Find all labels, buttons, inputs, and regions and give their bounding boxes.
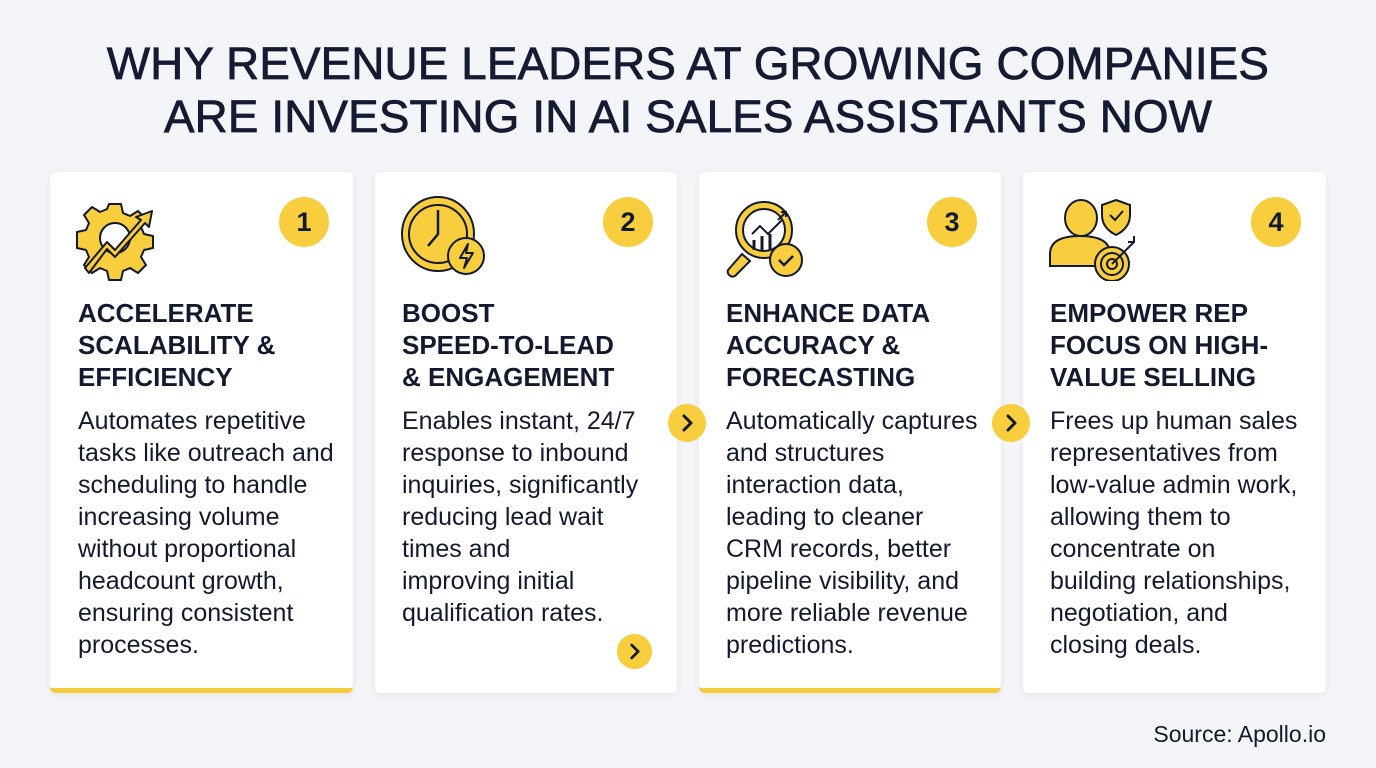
number badge 4: 4 [1268, 207, 1284, 237]
heading 4 [1050, 298, 1268, 392]
panel: card 3 [699, 172, 1001, 693]
heading 3: ACCURACY & [726, 330, 900, 360]
heading 1: SCALABILITY & [78, 330, 275, 360]
heading 4: EMPOWER REP [1050, 298, 1248, 328]
body 1: scheduling to handle [78, 471, 307, 499]
body 4: representatives from [1050, 439, 1278, 467]
panel: card 2 [375, 172, 677, 693]
number badge 3: 3 [944, 207, 960, 237]
heading 2: BOOST [402, 298, 494, 328]
heading 2: SPEED-TO-LEAD [402, 330, 614, 360]
panel: card 4 [1023, 172, 1326, 693]
heading 3: FORECASTING [726, 362, 915, 392]
body 4 [1050, 407, 1297, 659]
body 2: improving initial [402, 567, 574, 595]
body 3: predictions. [726, 631, 854, 659]
number badge 3 [927, 197, 977, 247]
heading 4: VALUE SELLING [1050, 362, 1256, 392]
body 1 [78, 407, 334, 659]
number badge 1 [279, 197, 329, 247]
body 3 [726, 407, 978, 659]
body 1: ensuring consistent [78, 599, 293, 627]
number badge 4 [1251, 197, 1301, 247]
body 3: more reliable revenue [726, 599, 968, 627]
icon: person shield target [1049, 199, 1135, 281]
heading 1: EFFICIENCY [78, 362, 233, 392]
body 3: Automatically captures [726, 407, 978, 435]
title: ARE INVESTING IN AI SALES ASSISTANTS NOW [164, 91, 1212, 142]
arrow: card 2 bottom [617, 634, 652, 669]
heading 2: & ENGAGEMENT [402, 362, 614, 392]
number badge 2 [603, 197, 653, 247]
heading 2 [402, 298, 614, 392]
body 2: response to inbound [402, 439, 629, 467]
body 1: Automates repetitive [78, 407, 306, 435]
body 2 [402, 407, 638, 627]
body 4: low-value admin work, [1050, 471, 1297, 499]
body 3: CRM records, better [726, 535, 951, 563]
heading 4: FOCUS ON HIGH- [1050, 330, 1268, 360]
source note: Source: Apollo.io [1153, 721, 1326, 747]
body 2: Enables instant, 24/7 [402, 407, 636, 435]
body 1: without proportional [78, 535, 296, 563]
body 3: interaction data, [726, 471, 904, 499]
body 3: and structures [726, 439, 884, 467]
body 4: Frees up human sales [1050, 407, 1297, 435]
arrow: card 2 to 3 [668, 404, 706, 442]
body 1: headcount growth, [78, 567, 284, 595]
heading 3: ENHANCE DATA [726, 298, 930, 328]
heading 1: ACCELERATE [78, 298, 254, 328]
title [106, 38, 1269, 142]
number badge 2: 2 [620, 207, 636, 237]
number badge 1: 1 [296, 207, 312, 237]
body 1: increasing volume [78, 503, 280, 531]
body 4: building relationships, [1050, 567, 1290, 595]
body 4: negotiation, and [1050, 599, 1228, 627]
icon: clock with lightning [401, 196, 485, 275]
body 2: inquiries, significantly [402, 471, 638, 499]
heading 3 [726, 298, 930, 392]
body 3: leading to cleaner [726, 503, 923, 531]
panel: card 1 [50, 172, 353, 693]
icon: gear with arrow [76, 203, 154, 281]
body 3: pipeline visibility, and [726, 567, 959, 595]
body 4: closing deals. [1050, 631, 1201, 659]
body 4: allowing them to [1050, 503, 1231, 531]
body 2: qualification rates. [402, 599, 604, 627]
body 4: concentrate on [1050, 535, 1215, 563]
body 1: processes. [78, 631, 199, 659]
icon: magnifier chart [726, 201, 803, 278]
body 2: times and [402, 535, 510, 563]
arrow: card 3 to 4 [992, 404, 1030, 442]
body 2: reducing lead wait [402, 503, 604, 531]
body 1: tasks like outreach and [78, 439, 334, 467]
title: WHY REVENUE LEADERS AT GROWING COMPANIES [107, 38, 1269, 89]
heading 1 [78, 298, 275, 392]
